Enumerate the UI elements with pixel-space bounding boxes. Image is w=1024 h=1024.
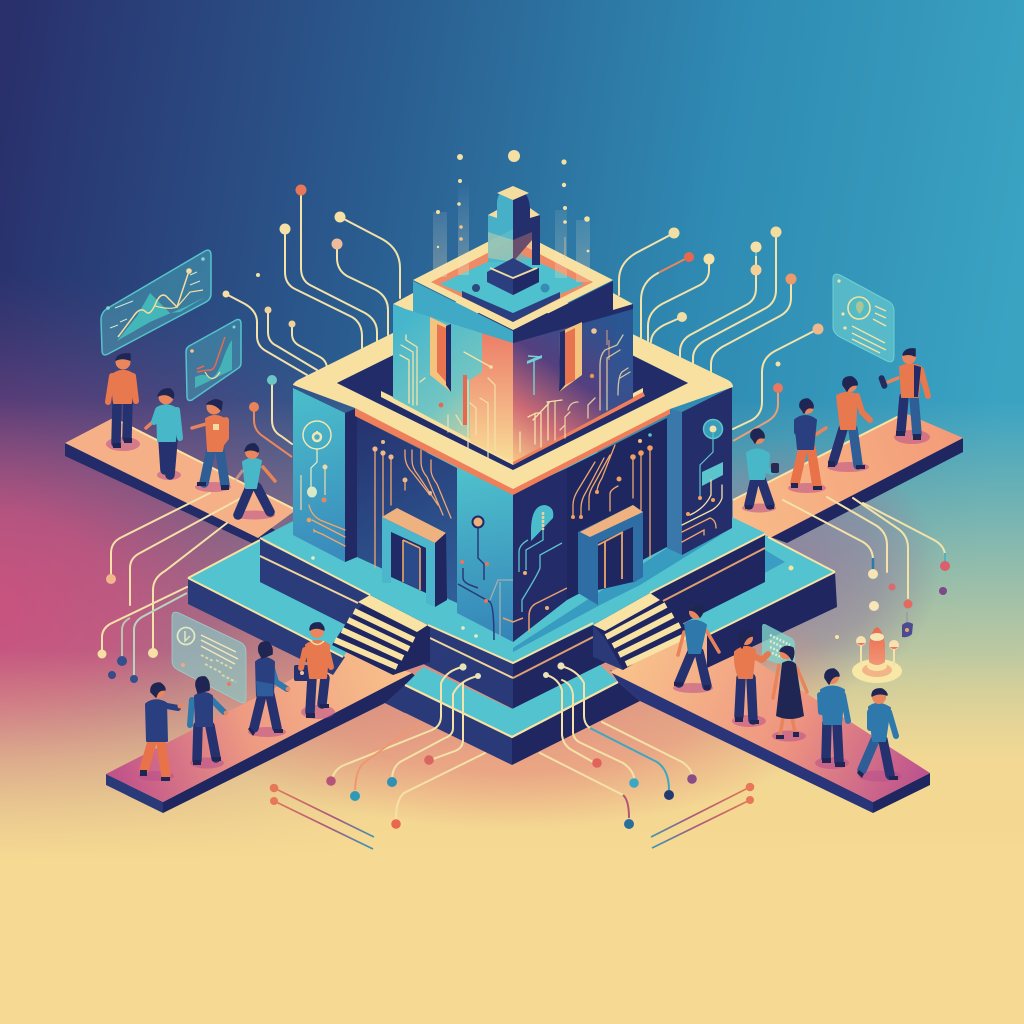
tower traces left — [400, 335, 495, 460]
person 10 — [190, 677, 228, 768]
circuit traces: upper left — [222, 184, 400, 457]
person 7 — [788, 399, 826, 493]
person 6 — [827, 377, 870, 472]
lower building — [293, 275, 733, 642]
beacon fountain icon — [852, 627, 902, 683]
spire — [487, 186, 540, 295]
floating data panel, lower left — [172, 612, 246, 703]
person 11 — [248, 642, 290, 737]
light beams and rising particles — [433, 150, 590, 282]
orange under rim — [355, 408, 670, 495]
floating chart panel 2 — [186, 320, 241, 400]
central right panel — [513, 468, 567, 642]
circuit traces: upper right — [619, 226, 824, 441]
left window — [430, 317, 451, 392]
left pilaster — [293, 388, 345, 562]
central left panel — [457, 468, 513, 642]
shoulder caps — [393, 293, 413, 312]
left tower face — [393, 304, 513, 462]
person 5 — [878, 349, 930, 444]
upper tier floor — [260, 410, 765, 663]
left doorway — [382, 508, 447, 607]
lower left walkway — [106, 652, 420, 813]
floating glass panel, lower right — [762, 624, 795, 668]
lock icon on right — [902, 612, 913, 637]
base platform: second tier left — [188, 540, 385, 675]
person 9 — [138, 683, 182, 781]
base platform: upper tier sides — [260, 535, 765, 709]
left recessed wall — [345, 413, 457, 603]
person 2 — [146, 389, 181, 480]
person 16 — [815, 669, 849, 769]
upper left walkway — [65, 418, 296, 546]
front lower tier — [385, 665, 640, 765]
group of people: upper left walkway — [106, 354, 275, 520]
base platform: second tier right — [650, 535, 837, 668]
rim sides — [393, 281, 513, 343]
floating profile panel, upper right — [833, 274, 894, 362]
group of people: lower right walkway — [673, 605, 902, 782]
tower roof rim — [413, 229, 613, 330]
circuit traces: bottom right fan — [540, 662, 697, 829]
group of people: upper right walkway — [742, 349, 930, 512]
right pilaster — [667, 408, 682, 555]
upper tower — [393, 229, 633, 462]
circuit traces crossing upper walkways — [98, 493, 950, 683]
cream rim — [293, 275, 733, 489]
diagonal connector pair, left — [270, 784, 374, 849]
floating chart panel 1 — [101, 250, 211, 355]
spire pedestal — [487, 258, 539, 295]
person 17 — [857, 689, 902, 782]
person 4 — [233, 444, 275, 520]
left stairs — [332, 595, 430, 675]
right window — [559, 322, 582, 392]
circuit traces: bottom left fan — [326, 663, 485, 829]
central slab — [462, 291, 560, 322]
right doorway — [578, 505, 643, 605]
person 13 — [673, 605, 719, 693]
person 8 — [742, 429, 779, 512]
person 15 — [772, 646, 807, 742]
inner hole — [337, 296, 688, 470]
person 12 — [294, 623, 335, 719]
person 1 — [106, 354, 140, 451]
person 14 — [732, 630, 768, 727]
right stairs — [593, 593, 690, 670]
lower right walkway — [610, 625, 930, 813]
right tower face — [513, 303, 633, 462]
tower traces right — [520, 328, 630, 452]
diagonal connector pair, right — [651, 783, 754, 848]
right recessed wall — [567, 418, 667, 600]
left wall traces — [372, 440, 451, 568]
group of people: lower left walkway — [138, 623, 335, 781]
person 3 — [192, 400, 231, 492]
upper right walkway — [733, 413, 963, 543]
